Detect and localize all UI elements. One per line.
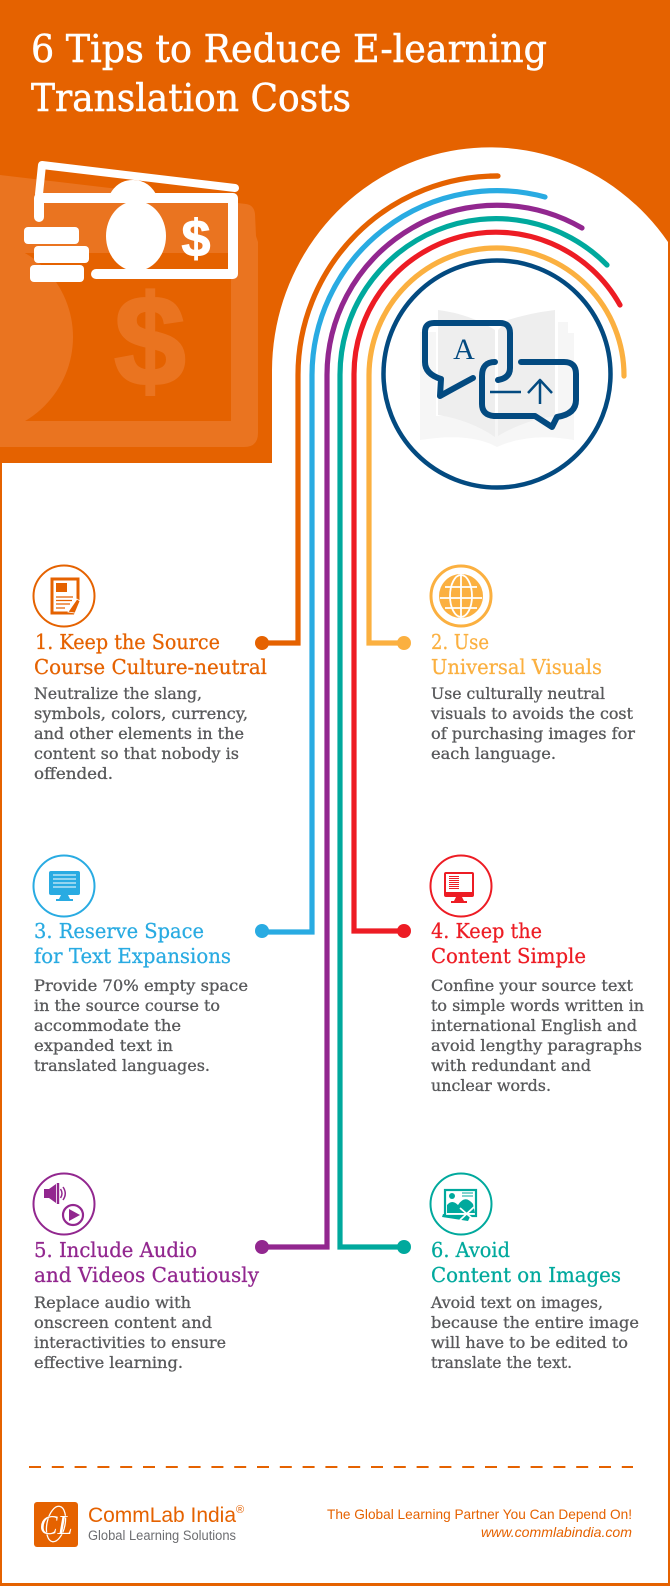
heading: 4. Keep the bbox=[431, 919, 542, 943]
line: tip 1 bbox=[255, 176, 498, 650]
heading: Content Simple bbox=[431, 944, 586, 968]
tagline: The Global Learning Partner You Can Depend On! bbox=[327, 1506, 632, 1522]
icon: audio and video bbox=[34, 1174, 94, 1234]
body text bbox=[34, 976, 248, 1075]
ghost book bbox=[420, 310, 574, 447]
body text: offended. bbox=[34, 764, 113, 783]
body text: because the entire image bbox=[431, 1313, 639, 1332]
line: tip 3 bbox=[255, 191, 545, 938]
body text bbox=[34, 684, 248, 783]
speech bubble translation bbox=[482, 362, 576, 427]
logo: CommLab India bbox=[34, 1502, 244, 1547]
heading: 1. Keep the Source bbox=[35, 630, 220, 654]
body text bbox=[34, 1293, 226, 1372]
body text: effective learning. bbox=[34, 1353, 183, 1372]
speech bubble A bbox=[425, 323, 510, 396]
heading bbox=[431, 630, 602, 679]
body text: to simple words written in bbox=[431, 996, 644, 1015]
logo: CommLab India: CommLab India bbox=[88, 1504, 236, 1527]
title: Translation Costs bbox=[31, 76, 351, 120]
body text: Provide 70% empty space bbox=[34, 976, 248, 995]
panel: tip 4 bbox=[430, 856, 644, 1095]
heading bbox=[34, 919, 231, 968]
line: tip 5 bbox=[255, 205, 582, 1254]
heading: 6. Avoid bbox=[431, 1238, 510, 1262]
line: tip 6 bbox=[340, 219, 607, 1254]
heading: for Text Expansions bbox=[34, 944, 231, 968]
body text: Avoid text on images, bbox=[430, 1293, 603, 1312]
body text: accommodate the bbox=[34, 1016, 181, 1035]
body text: expanded text in bbox=[34, 1036, 173, 1055]
body text: avoid lengthy paragraphs bbox=[431, 1036, 642, 1055]
tagline: www.commlabindia.com bbox=[481, 1524, 632, 1540]
body text: visuals to avoids the cost bbox=[430, 704, 634, 723]
line: tip 4 bbox=[354, 232, 620, 938]
panel: tip 1 bbox=[34, 566, 267, 783]
heading bbox=[431, 919, 586, 968]
icon: globe bbox=[431, 566, 491, 626]
logo: CommLab India: CL bbox=[39, 1510, 73, 1540]
logo: CommLab India: Global Learning Solutions bbox=[88, 1528, 236, 1543]
body text: unclear words. bbox=[431, 1076, 551, 1095]
title: 6 Tips to Reduce E-learning bbox=[31, 27, 547, 71]
icon: monitor with text bbox=[34, 856, 94, 916]
body text: in the source course to bbox=[34, 996, 220, 1015]
panel: tip 6 bbox=[430, 1174, 639, 1372]
heading: and Videos Cautiously bbox=[34, 1263, 259, 1287]
heading: Course Culture-neutral bbox=[34, 655, 267, 679]
body text: translate the text. bbox=[431, 1353, 572, 1372]
body text: Confine your source text bbox=[431, 976, 634, 995]
icon: translation circle with book and speech bubbles bbox=[384, 260, 610, 488]
heading: 2. Use bbox=[431, 630, 489, 654]
curved connector lines bbox=[255, 176, 624, 1254]
line: tip 2 bbox=[369, 248, 624, 650]
icon: image with cross bbox=[430, 1174, 492, 1234]
body text bbox=[430, 684, 635, 763]
icon: white banknotes and coins bbox=[24, 165, 235, 282]
tagline bbox=[327, 1506, 632, 1540]
heading bbox=[34, 1238, 259, 1287]
heading: 3. Reserve Space bbox=[34, 919, 204, 943]
body text: onscreen content and bbox=[34, 1313, 212, 1332]
panel: tip 5 bbox=[34, 1174, 259, 1372]
icon: white banknotes and coins: $ bbox=[182, 210, 211, 268]
body text: content so that nobody is bbox=[34, 744, 239, 763]
panel: tip 2 bbox=[430, 566, 635, 763]
body text: translated languages. bbox=[34, 1056, 210, 1075]
body text: symbols, colors, currency, bbox=[34, 704, 248, 723]
ghost money illustration: $ bbox=[114, 270, 186, 413]
heading: Content on Images bbox=[431, 1263, 621, 1287]
body text: interactivities to ensure bbox=[34, 1333, 226, 1352]
logo: CommLab India: ® bbox=[236, 1504, 244, 1516]
body text: each language. bbox=[431, 744, 556, 763]
body text: Replace audio with bbox=[34, 1293, 191, 1312]
heading bbox=[34, 630, 267, 679]
body text bbox=[430, 1293, 639, 1372]
body text: and other elements in the bbox=[34, 724, 244, 743]
body text bbox=[431, 976, 644, 1095]
title bbox=[31, 27, 547, 120]
icon: monitor with short text bbox=[430, 856, 492, 916]
ghost money illustration bbox=[0, 175, 258, 447]
heading: Universal Visuals bbox=[431, 655, 602, 679]
speech bubble A: A bbox=[453, 333, 475, 366]
body text: international English and bbox=[431, 1016, 637, 1035]
heading: 5. Include Audio bbox=[34, 1238, 197, 1262]
body text: Neutralize the slang, bbox=[34, 684, 202, 703]
icon: document bbox=[34, 566, 94, 626]
body text: with redundant and bbox=[431, 1056, 591, 1075]
heading bbox=[431, 1238, 621, 1287]
panel: tip 3 bbox=[34, 856, 248, 1075]
body text: will have to be edited to bbox=[431, 1333, 628, 1352]
body text: of purchasing images for bbox=[431, 724, 635, 743]
body text: Use culturally neutral bbox=[431, 684, 605, 703]
